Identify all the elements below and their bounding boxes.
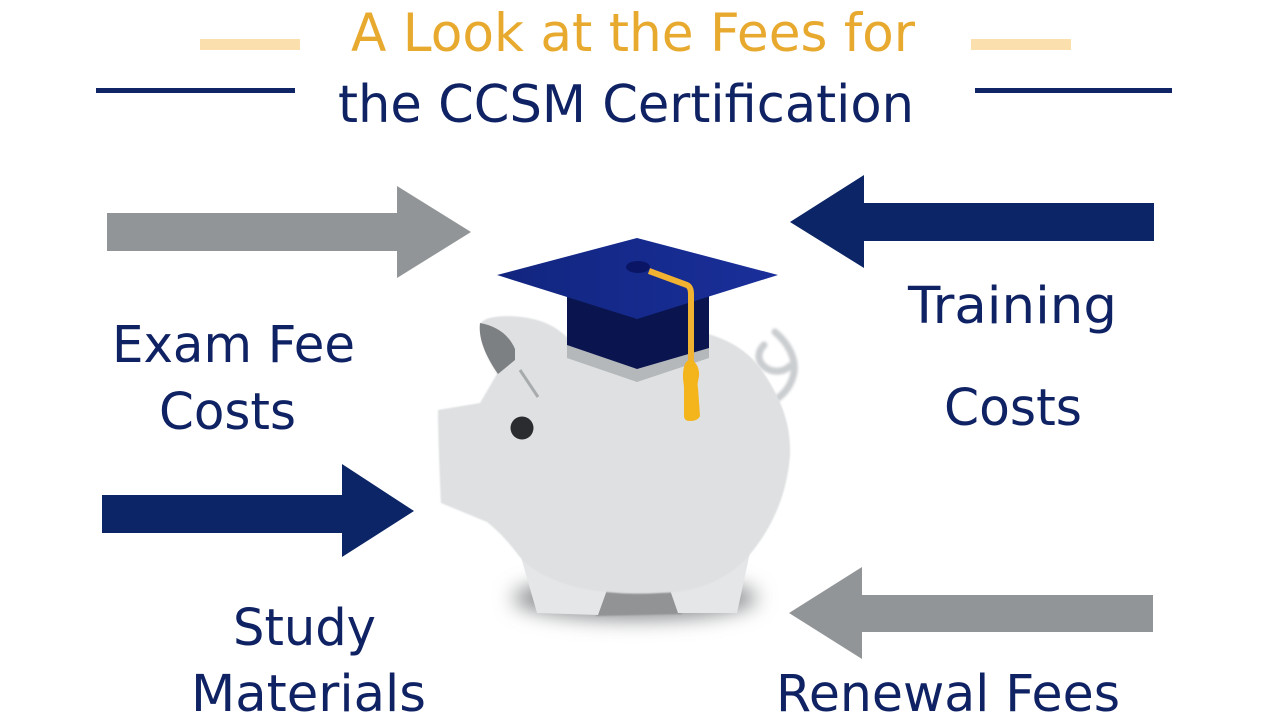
tassel cord xyxy=(649,271,691,365)
label: training costs: Training xyxy=(907,277,1117,336)
cap shadow xyxy=(567,345,709,382)
arrow: training costs xyxy=(790,175,1154,268)
pig body xyxy=(438,316,790,594)
tassel xyxy=(683,360,700,421)
label: training costs: Costs xyxy=(944,379,1082,438)
icon: piggy bank with graduation cap xyxy=(438,238,794,619)
shadow between legs xyxy=(596,588,682,616)
label: training costs xyxy=(907,277,1117,438)
title: the CCSM Certification xyxy=(338,75,914,135)
ground shadow xyxy=(513,577,757,619)
label: study materials: Study xyxy=(233,599,376,658)
label: exam fee costs: Costs xyxy=(159,383,296,442)
arrow: study materials xyxy=(102,464,414,557)
arrow: exam fee costs xyxy=(107,186,471,278)
cap board xyxy=(497,238,778,319)
title xyxy=(96,3,1172,135)
pig eye xyxy=(510,416,534,440)
pig tail xyxy=(759,332,794,398)
label: exam fee costs xyxy=(112,316,355,442)
pig eyebrow xyxy=(520,370,538,397)
cap button xyxy=(626,261,650,273)
title: A Look at the Fees for xyxy=(351,3,915,64)
pig legs xyxy=(519,543,752,615)
label: study materials xyxy=(191,599,426,720)
arrow: renewal fees xyxy=(789,567,1153,659)
pig ear xyxy=(480,323,515,374)
label: exam fee costs: Exam Fee xyxy=(112,316,355,375)
cap base xyxy=(567,290,709,369)
